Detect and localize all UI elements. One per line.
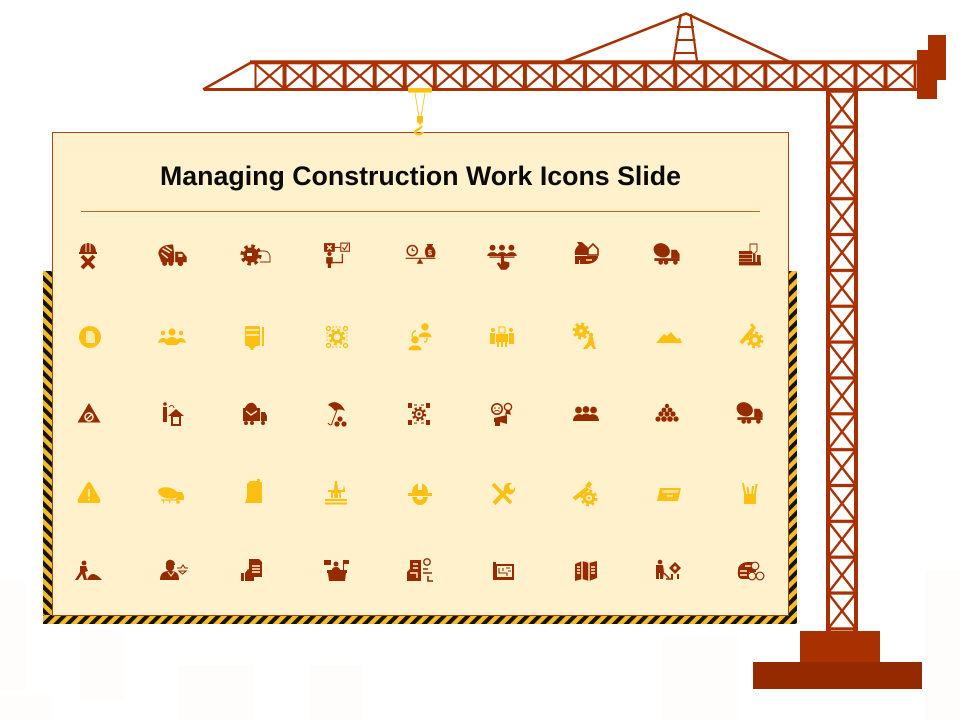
icon: wrench with gear [574,481,596,505]
icon: umbrella with coins [328,402,347,427]
icon: yellow circle with document [79,326,101,348]
icon: yellow warning triangle [78,482,100,503]
icon: time money scale [406,244,435,264]
icon: folder plate [657,488,681,501]
icon: gear process network [326,326,348,348]
icon: cup with pencils [743,483,756,504]
icon: worker with chart [160,560,188,580]
icon: worker digging pile [75,561,102,580]
icon: team group [158,328,186,345]
crane base [753,631,922,689]
icon: sad face and megaphone [492,403,512,426]
icon: oil rig [325,481,347,504]
icon: bricks and shovel [739,244,761,265]
icon: helmet with gear [408,483,432,505]
icon: warning triangle with prohibition [78,403,100,422]
icon: people exchange [408,323,432,350]
crane hook [408,88,432,134]
crane top mast and ties [563,14,790,62]
background: faint city silhouette [0,570,960,720]
icon: worker carrying gear [574,324,596,349]
icon: gear with house outline [242,246,270,264]
icon grid [75,241,764,581]
hazard stripe frame [43,271,797,624]
icon: team selection hand [487,245,517,270]
icon: log pile [738,562,764,580]
icon: meeting table [490,327,514,347]
icon: yellow mixer truck [157,486,184,504]
counterweight [917,35,946,99]
crane tower mast [826,89,858,631]
icon: concrete mixer truck [651,241,680,265]
icon: gear money with people [408,403,430,425]
icon: mountains [656,332,682,343]
title divider [81,211,760,212]
main panel [52,132,788,616]
icon: helmet and tools [79,243,97,268]
icon: debris truck [158,244,187,266]
icon: person with house [163,402,184,426]
icon: crossed wrench and screwdriver [493,483,515,504]
title: Managing Construction Work Icons Slide [160,161,681,191]
icon: wrench and gear [741,324,762,347]
icon: podium with speaker [324,560,349,581]
icon: open map [575,561,597,581]
tower crane [203,14,946,689]
icon: yellow clipboard bag [245,479,262,503]
icon: brain circuit with bulb [407,559,433,581]
icon: pile of rocks [655,404,679,422]
icon: person with decision boxes [324,243,349,268]
icon: document and thumbs up [241,559,262,581]
icon: loaded truck [243,403,267,425]
icon: concrete mixer truck [734,400,763,424]
icon: money bag with house on hand [575,242,598,265]
crane jib [203,60,918,91]
icon: blueprint [493,562,514,580]
icon: clipboard with bulb [245,326,264,350]
icon: worker with sign [656,560,681,579]
icon: three people [573,406,599,421]
icon: time money scale: $ [428,248,433,257]
